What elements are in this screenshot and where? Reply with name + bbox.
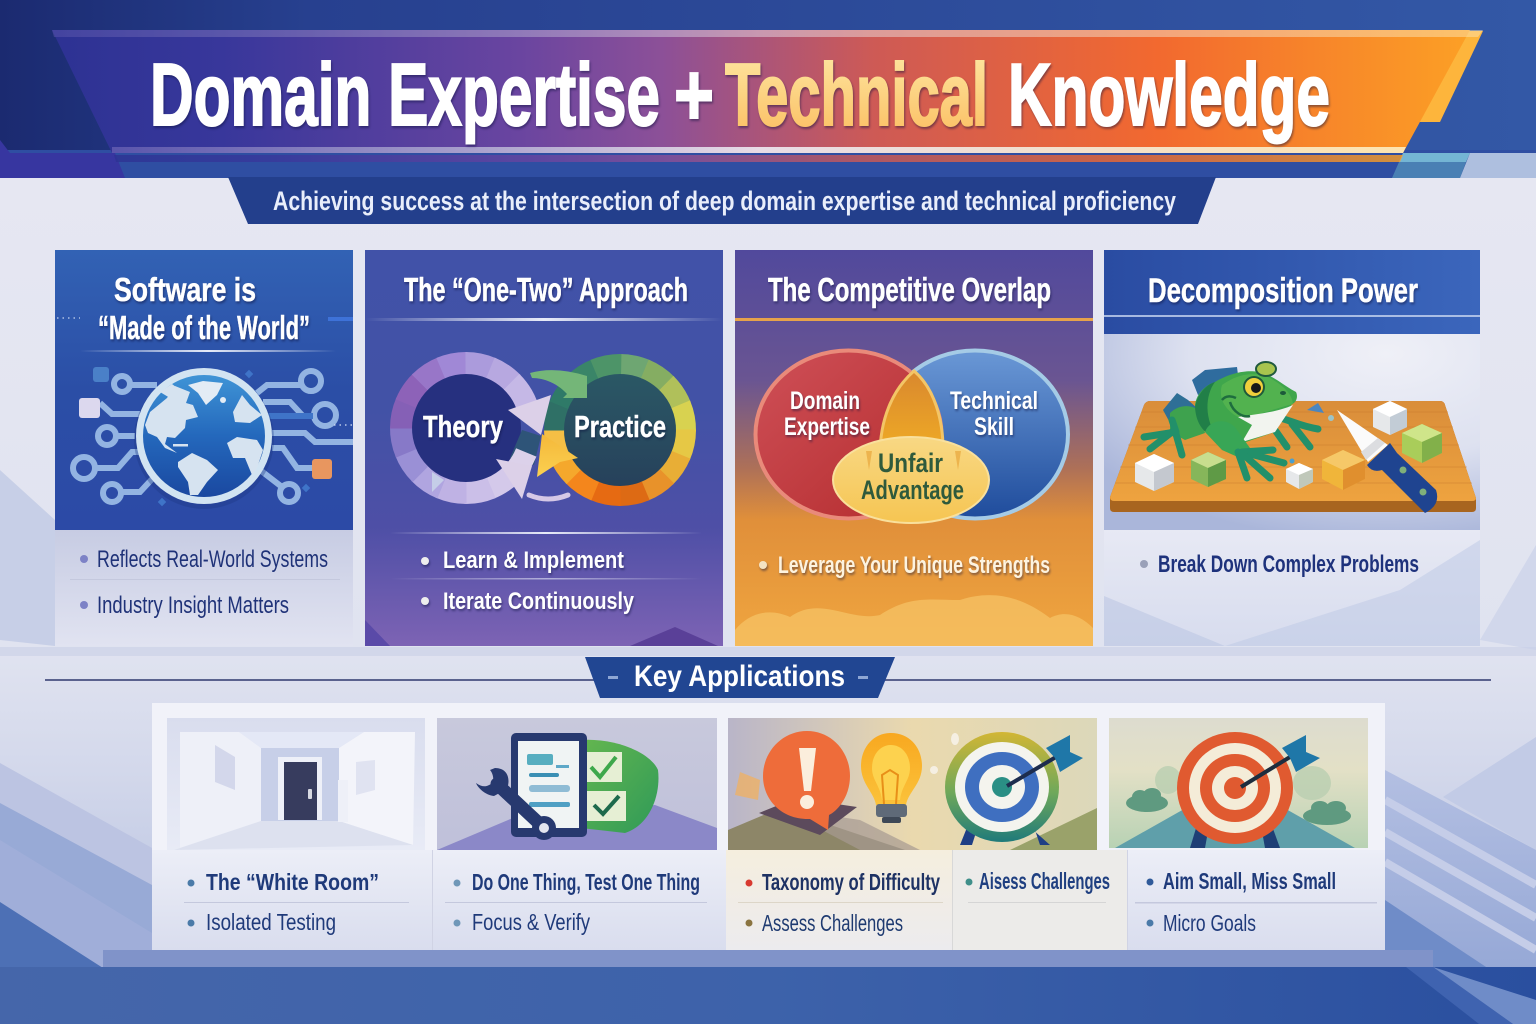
icon: target with dart [1177, 732, 1320, 848]
arrow: yellow [537, 434, 578, 477]
label: unfair advantage [861, 448, 964, 505]
text: white room: The “White Room” [206, 869, 379, 895]
panel: competitive overlap [735, 250, 1093, 646]
bullet [1140, 551, 1419, 578]
icon: warning bubble [763, 731, 850, 830]
bullet: Break Down Complex Problems [1158, 551, 1419, 578]
right arm [1275, 418, 1318, 447]
label: practice: Practice [574, 409, 666, 444]
text: do one thing: Do One Thing, Test One Thing [472, 869, 700, 895]
bullet list [421, 547, 635, 615]
card: taxonomy of difficulty [728, 718, 1097, 850]
bullet list: Industry Insight Matters [97, 592, 289, 619]
bullet: Leverage Your Unique Strengths [778, 552, 1050, 579]
label: domain expertise: Expertise [784, 413, 870, 441]
label: domain expertise [784, 387, 870, 441]
icon: circuit lines [73, 371, 353, 502]
text: taxonomy of difficulty [726, 850, 1127, 950]
label: domain expertise: Domain [790, 387, 860, 415]
text: taxonomy of difficulty: Taxonomy of Difficulty [762, 869, 940, 895]
text: aim small: Micro Goals [1163, 910, 1256, 936]
icon: light bulb [861, 733, 922, 823]
practice ring [527, 337, 713, 523]
panel heading: The “One-Two” Approach [404, 271, 688, 308]
body and head [1195, 371, 1297, 444]
icon: target with dart [945, 732, 1083, 845]
oval: unfair advantage [833, 437, 989, 523]
label: technical skill [950, 387, 1038, 441]
knife [1337, 410, 1437, 513]
title text [150, 45, 1330, 144]
theory ring [374, 336, 558, 520]
right diagonal bands [1443, 737, 1536, 850]
label: unfair advantage: Unfair [878, 448, 943, 478]
panel heading: Decomposition Power [1148, 272, 1418, 310]
label: theory: Theory [423, 409, 504, 444]
text: white room: Isolated Testing [206, 909, 336, 935]
rear leg [1170, 406, 1205, 440]
panel heading: The Competitive Overlap [768, 271, 1051, 308]
card: aim small [1109, 718, 1368, 848]
diagram: theory and practice loop [374, 336, 713, 523]
card: do one thing [437, 718, 717, 850]
subtitle ribbon: Achieving success at the intersection of deep domain expertise and technical proficiency [273, 186, 1176, 216]
text: aim small [1127, 850, 1377, 950]
left diagonal bands [0, 763, 152, 968]
title text: Domain Expertise [150, 45, 660, 144]
text: taxonomy of difficulty: Assess Challenges [762, 910, 903, 936]
illustration: frog on cutting board [1110, 362, 1476, 513]
title text: + [674, 45, 714, 144]
panel heading: Software is [114, 271, 256, 308]
panel: decomposition power [1104, 250, 1480, 646]
text: aim small: Aim Small, Miss Small [1163, 868, 1336, 894]
bullet list [80, 546, 328, 619]
bullet list: Iterate Continuously [443, 588, 635, 615]
frog [1144, 362, 1318, 478]
bullet list: Reflects Real-World Systems [97, 546, 328, 573]
wrench [476, 768, 556, 840]
front leg [1205, 421, 1250, 458]
text: taxonomy of difficulty: Aisess Challenges [979, 868, 1110, 894]
arrow: green [530, 370, 587, 398]
bullet [759, 552, 1050, 579]
subtitle ribbon [228, 177, 1216, 224]
section header: key applications [45, 657, 1491, 698]
title text: Knowledge [1008, 45, 1330, 144]
panel heading: “Made of the World” [98, 309, 310, 346]
clipboard [511, 733, 587, 837]
door [284, 762, 317, 820]
panel: software is made of the world [55, 250, 353, 646]
section header: key applications: Key Applications [634, 660, 845, 693]
cutting board [1110, 401, 1476, 512]
text: do one thing: Focus & Verify [472, 909, 590, 935]
icon: globe [134, 368, 274, 509]
arrow: theory return [496, 459, 532, 499]
text: do one thing [445, 869, 707, 935]
panel heading [98, 271, 310, 346]
label: unfair advantage: Advantage [861, 475, 964, 505]
label: technical skill: Technical [950, 387, 1038, 415]
venn diagram [756, 350, 1068, 523]
arrow: theory to practice top [508, 395, 551, 435]
label: technical skill: Skill [974, 413, 1014, 441]
bullet list: Learn & Implement [443, 547, 624, 574]
circle: domain expertise [756, 350, 942, 518]
circle: technical skill [882, 350, 1068, 518]
overlap lens [880, 371, 943, 455]
text: white room [184, 869, 409, 935]
panel: one-two approach [365, 250, 723, 646]
card: white room [167, 718, 425, 850]
title text: Technical [725, 45, 988, 144]
cubes [1135, 401, 1442, 491]
panel: key applications [152, 703, 1385, 950]
title banner [52, 30, 1483, 162]
